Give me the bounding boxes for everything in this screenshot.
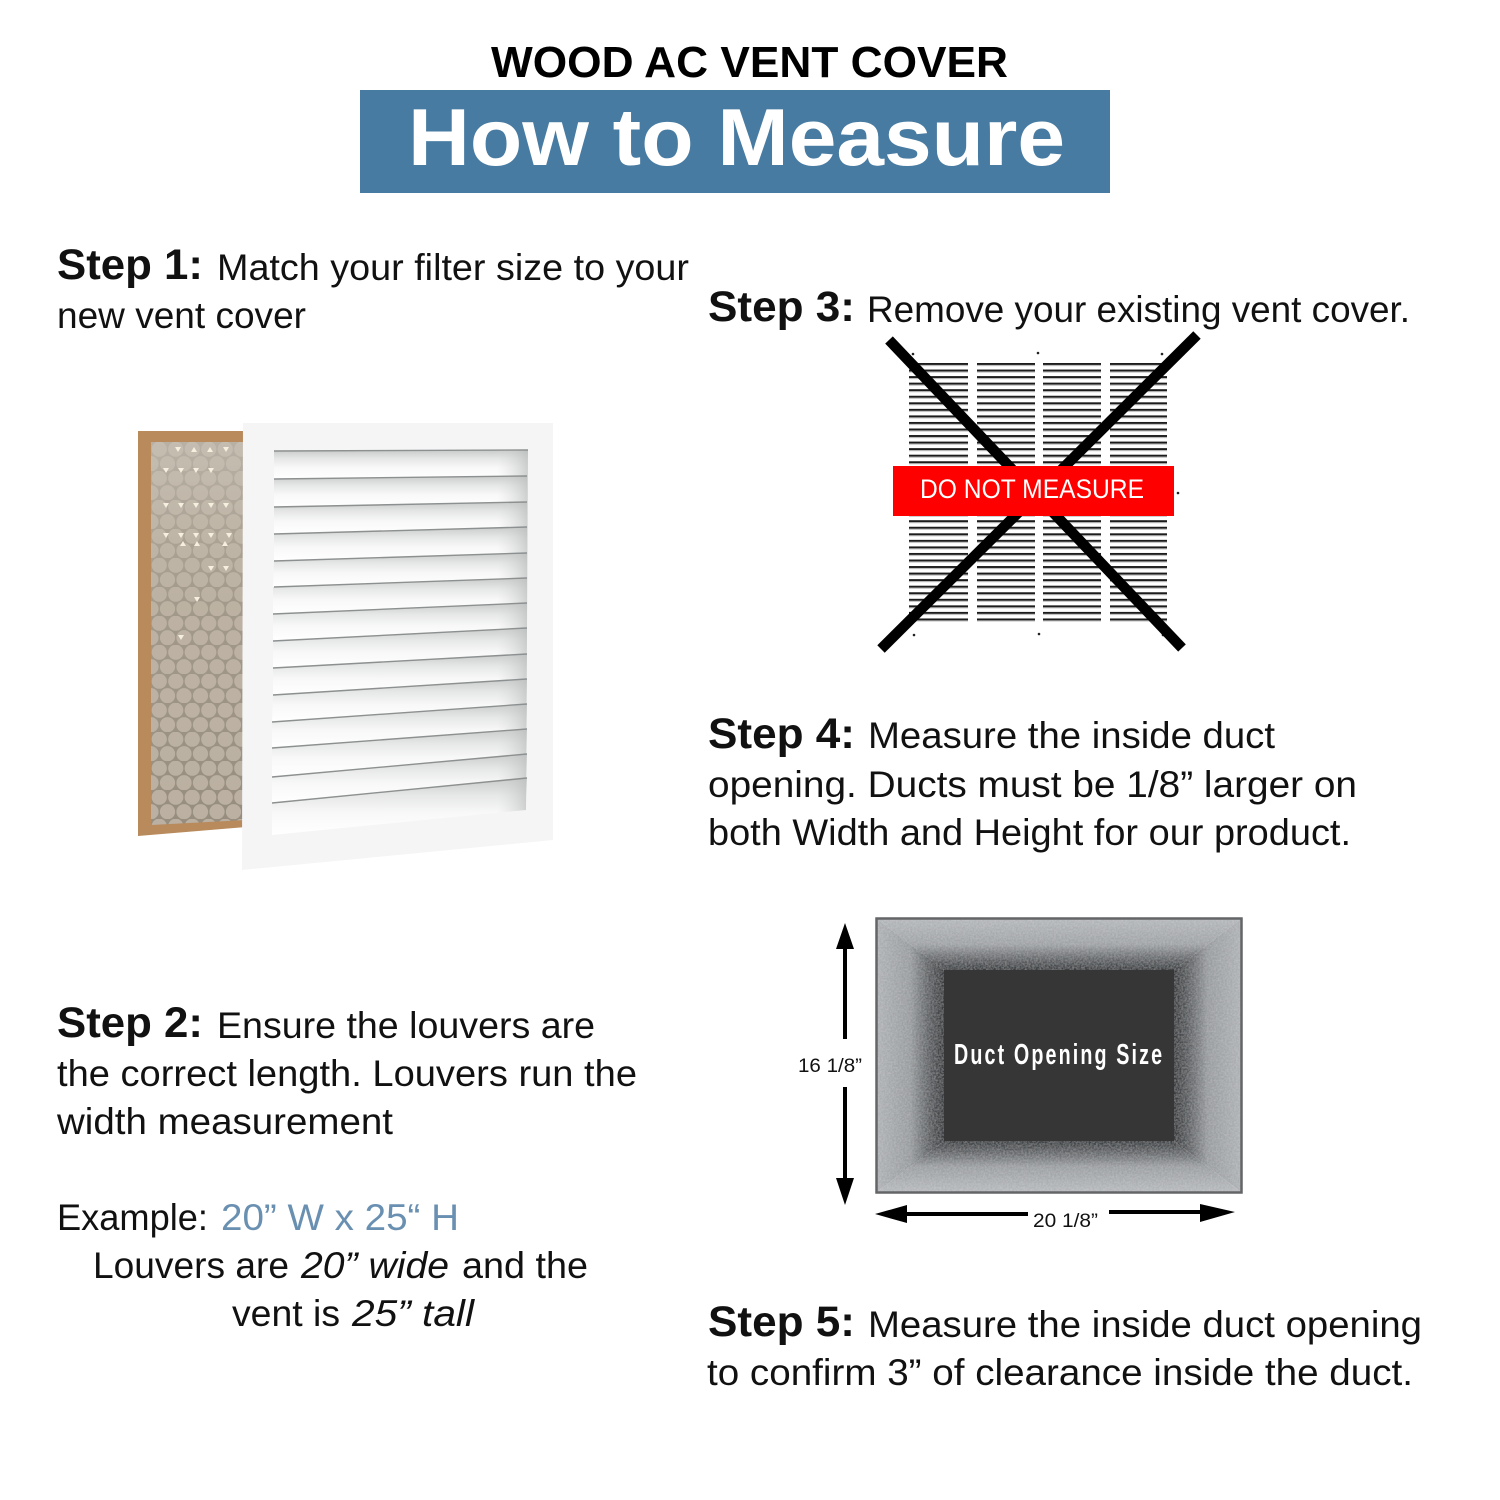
arrow: width	[875, 1204, 1235, 1232]
illustration: air filter behind white louvered vent cover	[138, 423, 553, 870]
example text: 25” tall	[351, 1293, 476, 1334]
vent cover frame	[242, 423, 553, 870]
louvers	[272, 450, 528, 835]
step 1 text: Match your filter size to your	[217, 247, 689, 288]
air filter	[138, 431, 246, 836]
step 3 text: Step 3:	[708, 283, 855, 331]
step 1 text	[57, 241, 689, 336]
example text: 20” wide	[300, 1245, 449, 1286]
arrow: height	[798, 923, 862, 1205]
step 2 text: width measurement	[56, 1101, 394, 1142]
step 5 text	[707, 1298, 1422, 1393]
title: WOOD AC VENT COVER	[491, 38, 1008, 87]
step 4 text: Step 4:	[708, 710, 855, 758]
step 5 text: to confirm 3” of clearance inside the duct.	[707, 1352, 1413, 1393]
step 4 text: both Width and Height for our product.	[708, 812, 1351, 853]
black cross	[881, 335, 1197, 649]
example text: Example:	[57, 1197, 208, 1238]
step 4 text	[708, 710, 1357, 853]
step 3 text: Remove your existing vent cover.	[867, 289, 1410, 330]
example text: 20” W x 25“ H	[221, 1197, 459, 1238]
step 1 text: new vent cover	[57, 295, 306, 336]
step 2 text: Ensure the louvers are	[217, 1005, 595, 1046]
illustration: crossed-out existing vent cover	[881, 335, 1197, 649]
grille columns	[909, 363, 1167, 625]
step 2 text: Step 2:	[57, 999, 203, 1047]
do not measure label: DO NOT MEASURE	[920, 474, 1144, 504]
arrow: width: 20 1/8”	[1033, 1210, 1098, 1232]
step 2 text	[56, 999, 637, 1142]
step 2 text: the correct length. Louvers run the	[57, 1053, 637, 1094]
example text	[57, 1197, 588, 1334]
do not measure label	[893, 466, 1174, 516]
arrow: height: 16 1/8”	[798, 1055, 862, 1077]
illustration: duct opening with dimensions	[798, 918, 1242, 1232]
example text: vent is	[232, 1293, 340, 1334]
example text: and the	[462, 1245, 588, 1286]
step 1 text: Step 1:	[57, 241, 203, 289]
duct opening back panel	[944, 970, 1174, 1141]
duct outline	[876, 918, 1242, 1192]
step 5 text: Step 5:	[708, 1298, 855, 1346]
step 4 text: opening. Ducts must be 1/8” larger on	[708, 764, 1357, 805]
screw holes	[912, 352, 1179, 636]
banner: how to measure: How to Measure	[408, 93, 1065, 183]
step 4 text: Measure the inside duct	[868, 715, 1276, 756]
example text: Louvers are	[93, 1245, 289, 1286]
step 3 text	[708, 283, 1410, 331]
duct opening back panel: Duct Opening Size	[954, 1039, 1162, 1071]
step 5 text: Measure the inside duct opening	[868, 1304, 1422, 1345]
duct walls	[877, 919, 1241, 1192]
